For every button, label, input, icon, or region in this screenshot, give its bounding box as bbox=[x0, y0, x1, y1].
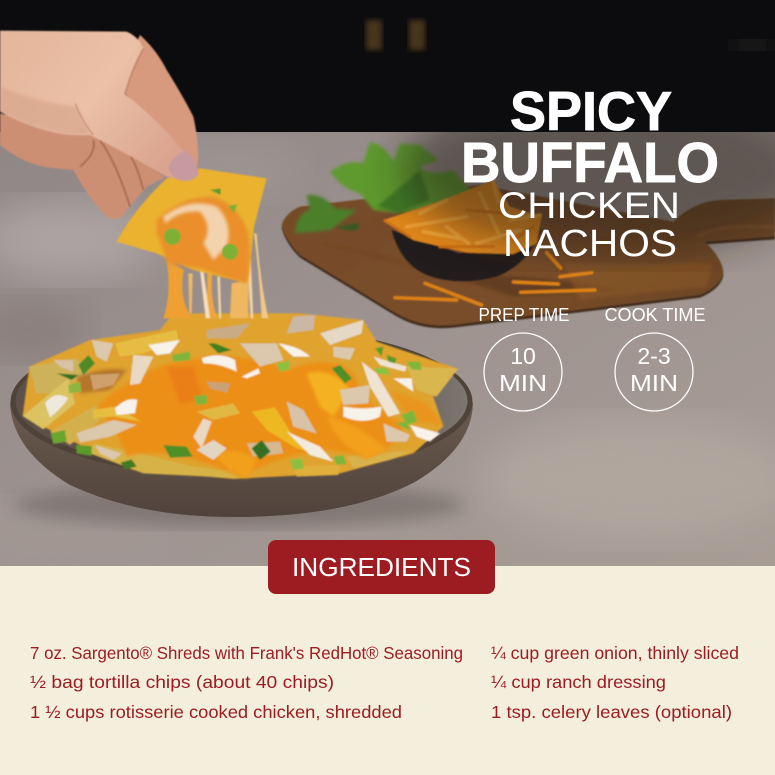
title: SPICY bbox=[510, 80, 672, 142]
cook time: COOK TIME bbox=[604, 304, 706, 325]
ingredients list: left column bbox=[30, 643, 463, 722]
ingredients list: right column: ¼ cup green onion, thinly sliced bbox=[491, 643, 739, 663]
ingredients list: left column: 7 oz. Sargento® Shreds with Frank's RedHot® Seasoning bbox=[30, 643, 463, 663]
ranch dressing bbox=[45, 340, 440, 462]
folded yellow chip bbox=[252, 407, 317, 453]
title: CHICKEN bbox=[498, 185, 680, 226]
title area shading bbox=[400, 85, 775, 255]
ingredients panel bbox=[0, 566, 775, 775]
prep time: 10 bbox=[510, 343, 536, 369]
title: BUFFALO bbox=[461, 131, 719, 195]
prep time: MIN bbox=[499, 370, 547, 396]
green onions bbox=[51, 343, 422, 470]
palm and thumb bbox=[0, 31, 197, 180]
cheese strings bbox=[163, 233, 268, 318]
cook time: MIN bbox=[630, 370, 678, 396]
ingredients list: right column: 1 tsp. celery leaves (optional) bbox=[491, 702, 732, 722]
prep time bbox=[478, 304, 570, 411]
prep time: PREP TIME bbox=[478, 304, 570, 325]
dark cabinet backdrop bbox=[0, 0, 775, 132]
tortilla chip with melted cheese bbox=[117, 168, 268, 318]
ingredients heading badge bbox=[268, 540, 495, 594]
title: NACHOS bbox=[503, 223, 677, 265]
curled fingers bbox=[0, 113, 165, 219]
plate bbox=[10, 326, 473, 517]
icon: celery leaves bbox=[295, 142, 477, 233]
icon: hand holding the chip bbox=[0, 31, 198, 219]
stone countertop bbox=[0, 130, 775, 568]
ingredients list: left column: ½ bag tortilla chips (about 40 chips) bbox=[30, 672, 334, 692]
ingredients list: left column: 1 ½ cups rotisserie cooked chicken, shredded bbox=[30, 702, 402, 722]
cook time: 2-3 bbox=[637, 343, 671, 369]
nachos pile bbox=[23, 313, 458, 479]
title bbox=[461, 80, 719, 265]
ingredients list: right column bbox=[491, 643, 739, 722]
cook time bbox=[604, 304, 706, 411]
ingredients heading badge: INGREDIENTS bbox=[292, 552, 471, 582]
yellow tortilla chips bbox=[23, 330, 458, 478]
plate shadow bbox=[15, 483, 465, 527]
cutting board with handle bbox=[282, 185, 775, 328]
shredded chicken bbox=[53, 315, 410, 460]
bowl of shredded cheese bbox=[383, 180, 595, 305]
melted orange cheese bbox=[97, 357, 403, 477]
ingredients list: right column: ¼ cup ranch dressing bbox=[491, 672, 666, 692]
index finger bbox=[125, 35, 198, 167]
